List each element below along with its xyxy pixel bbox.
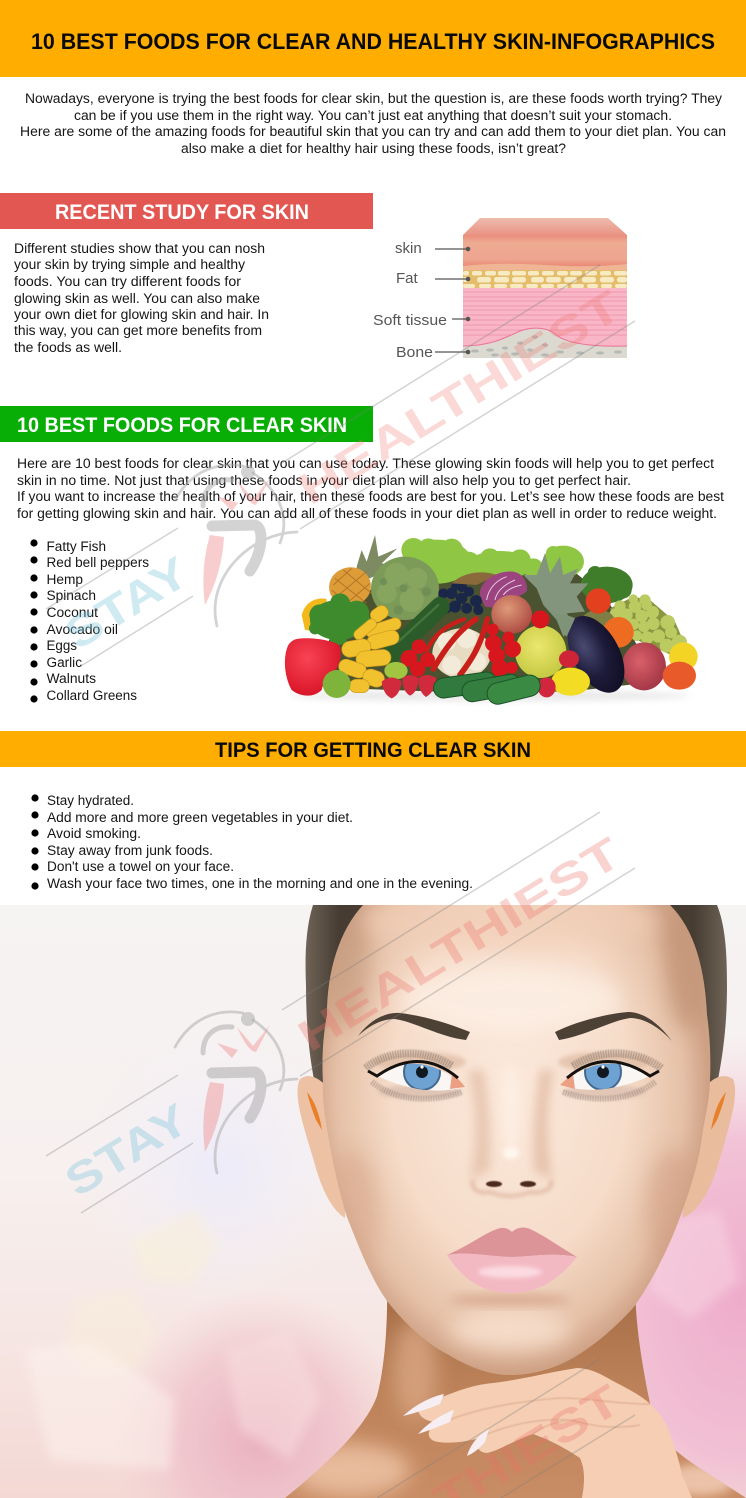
watermark logo xyxy=(175,465,297,626)
limes xyxy=(323,662,408,698)
left eyebrow xyxy=(358,1013,470,1040)
right ear xyxy=(683,1076,735,1218)
herbs back right xyxy=(581,566,633,603)
fruit and vegetable pile xyxy=(285,535,698,706)
pomegranate xyxy=(491,595,532,634)
zucchini xyxy=(392,607,440,653)
grapes xyxy=(610,594,687,658)
lemon xyxy=(551,668,590,696)
watermark lines xyxy=(46,812,635,1213)
ground shadow xyxy=(290,690,690,701)
small orange xyxy=(663,662,696,690)
right eyebrow xyxy=(555,1012,672,1041)
intro text: also make a diet for healthy hair using these foods, isn’t great? xyxy=(181,141,566,157)
watermark text: HEALTHIEST xyxy=(290,281,630,515)
tips bullet list: Avoid smoking. xyxy=(47,826,141,842)
tomato xyxy=(586,588,611,614)
recent study text: this way, you can get more benefits from xyxy=(14,323,262,339)
foods paragraph: If you want to increase the health of your hair, then these foods are best for you. Let’s see how these foods are best xyxy=(17,489,724,505)
watermark text: STAY xyxy=(57,1095,198,1207)
lettuce xyxy=(401,538,584,584)
foods bullet list: Coconut xyxy=(46,605,98,621)
fat layer xyxy=(463,264,627,289)
foods bullet list: Fatty Fish xyxy=(46,539,106,555)
herbs xyxy=(309,593,372,645)
foods bullet list: Avocado oil xyxy=(46,622,118,638)
foods bullet list: Red bell peppers xyxy=(46,555,149,571)
nose xyxy=(472,1180,551,1196)
red bell pepper xyxy=(285,638,341,696)
foods bullet list xyxy=(30,539,149,704)
face xyxy=(320,890,715,1375)
skin top face xyxy=(463,218,627,235)
big melon xyxy=(515,625,566,678)
blurred pink background xyxy=(0,905,746,1498)
right eye xyxy=(558,1052,661,1099)
blueberries xyxy=(438,581,483,615)
foods paragraph: Here are 10 best foods for clear skin that you can use today. These glowing skin foods will help you to get perfect xyxy=(17,456,714,472)
diagram labels: Bone xyxy=(396,344,433,361)
watermark logo xyxy=(175,1012,297,1173)
tips bullet list: Stay away from junk foods. xyxy=(47,843,213,859)
lips xyxy=(447,1228,577,1293)
foods bullet list: Eggs xyxy=(46,638,77,654)
soft tissue layer xyxy=(463,288,627,348)
watermark: lower xyxy=(377,1359,635,1498)
strawberry small xyxy=(538,677,556,697)
tips bullet list: Stay hydrated. xyxy=(47,793,134,809)
skin layer xyxy=(463,235,627,267)
diagram labels: Fat xyxy=(396,270,419,287)
watermark text xyxy=(57,281,630,660)
foods bullet list: Spinach xyxy=(46,588,96,604)
panel: tips heading xyxy=(0,731,746,767)
watermark lines xyxy=(46,265,635,666)
foods bullet list: Hemp xyxy=(46,572,83,588)
intro text: can be if you use them in the right way. You can’t just eat anything that doesn’t suit your stomach. xyxy=(74,108,672,124)
strawberries xyxy=(382,675,437,698)
title banner xyxy=(0,0,746,77)
neck and shoulders xyxy=(285,1280,746,1498)
diagram labels: Soft tissue xyxy=(373,312,447,329)
recent study text: Different studies show that you can nosh xyxy=(14,241,265,257)
bark piece xyxy=(452,572,497,585)
title banner: 10 BEST FOODS FOR CLEAR AND HEALTHY SKIN-INFOGRAPHICS xyxy=(31,29,715,54)
cauliflower xyxy=(432,628,491,678)
skin layers diagram xyxy=(373,218,627,361)
recent study text: your own diet for glowing skin and hair. In xyxy=(14,307,269,323)
watermark lines xyxy=(377,1359,635,1498)
recent study text: foods. You can try different foods for xyxy=(14,274,241,290)
panel: recent study heading xyxy=(0,193,373,229)
pineapple crown xyxy=(523,553,588,637)
foods paragraph: for getting glowing skin and hair. You can add all of these foods in your diet plan as well in order to reduce weight. xyxy=(17,506,717,522)
hand xyxy=(403,1368,692,1498)
pineapple xyxy=(326,535,397,609)
pile backing xyxy=(317,568,657,692)
left ear xyxy=(298,1076,345,1218)
hair xyxy=(306,905,727,1090)
apple xyxy=(622,642,666,690)
bananas xyxy=(337,603,403,693)
nose shading xyxy=(468,1065,554,1180)
tips bullet list xyxy=(31,793,473,892)
watermark: middle xyxy=(46,812,635,1213)
panel: 10 best foods heading xyxy=(0,406,373,442)
watermark text xyxy=(57,828,630,1207)
intro text xyxy=(20,91,726,157)
foods paragraph: skin in no time. Not just that using these foods in your diet plan will also help you to get perfect hair. xyxy=(17,473,631,489)
watermark: upper xyxy=(46,265,635,666)
left eye xyxy=(366,1052,466,1099)
fingernails xyxy=(403,1394,489,1456)
watermark text: HEALTHIEST xyxy=(290,828,630,1062)
recent study text: the foods as well. xyxy=(14,340,122,356)
foods bullet list: Walnuts xyxy=(46,671,96,687)
recent study text: your skin by trying simple and healthy xyxy=(14,257,246,273)
orange xyxy=(603,617,634,648)
pineapple base xyxy=(582,610,614,630)
foods bullet list: Collard Greens xyxy=(46,688,137,704)
intro text: Nowadays, everyone is trying the best foods for clear skin, but the question is, are these foods worth trying? They xyxy=(25,91,723,107)
recent study text: glowing skin as well. You can also make xyxy=(14,291,260,307)
chili peppers xyxy=(427,619,487,675)
strawberry xyxy=(559,650,579,668)
tips bullet list: Add more and more green vegetables in your diet. xyxy=(47,810,353,826)
red cabbage xyxy=(480,572,527,608)
bone layer xyxy=(463,328,627,358)
woman's face photo xyxy=(0,890,746,1498)
cucumbers xyxy=(432,671,542,706)
watermark text: STAY xyxy=(57,548,198,660)
yellow fruit xyxy=(669,642,698,671)
diagram labels: skin xyxy=(395,240,422,257)
cherry tomatoes xyxy=(401,610,549,677)
yellow pepper xyxy=(302,598,327,632)
panel: tips heading: TIPS FOR GETTING CLEAR SKIN xyxy=(215,738,531,762)
tips bullet list: Don't use a towel on your face. xyxy=(47,859,234,875)
foods paragraph xyxy=(17,456,724,522)
broccoli xyxy=(371,557,439,620)
foods bullet list: Garlic xyxy=(46,655,82,671)
tips bullet list: Wash your face two times, one in the morning and one in the evening. xyxy=(47,876,473,892)
panel: recent study heading: RECENT STUDY FOR SKIN xyxy=(55,200,309,224)
recent study text xyxy=(14,241,269,356)
diagram labels xyxy=(373,240,470,361)
eggplant xyxy=(550,607,636,702)
intro text: Here are some of the amazing foods for beautiful skin that you can try and can add them to your diet plan. You can xyxy=(20,124,726,140)
panel: 10 best foods heading: 10 BEST FOODS FOR CLEAR SKIN xyxy=(17,413,347,437)
